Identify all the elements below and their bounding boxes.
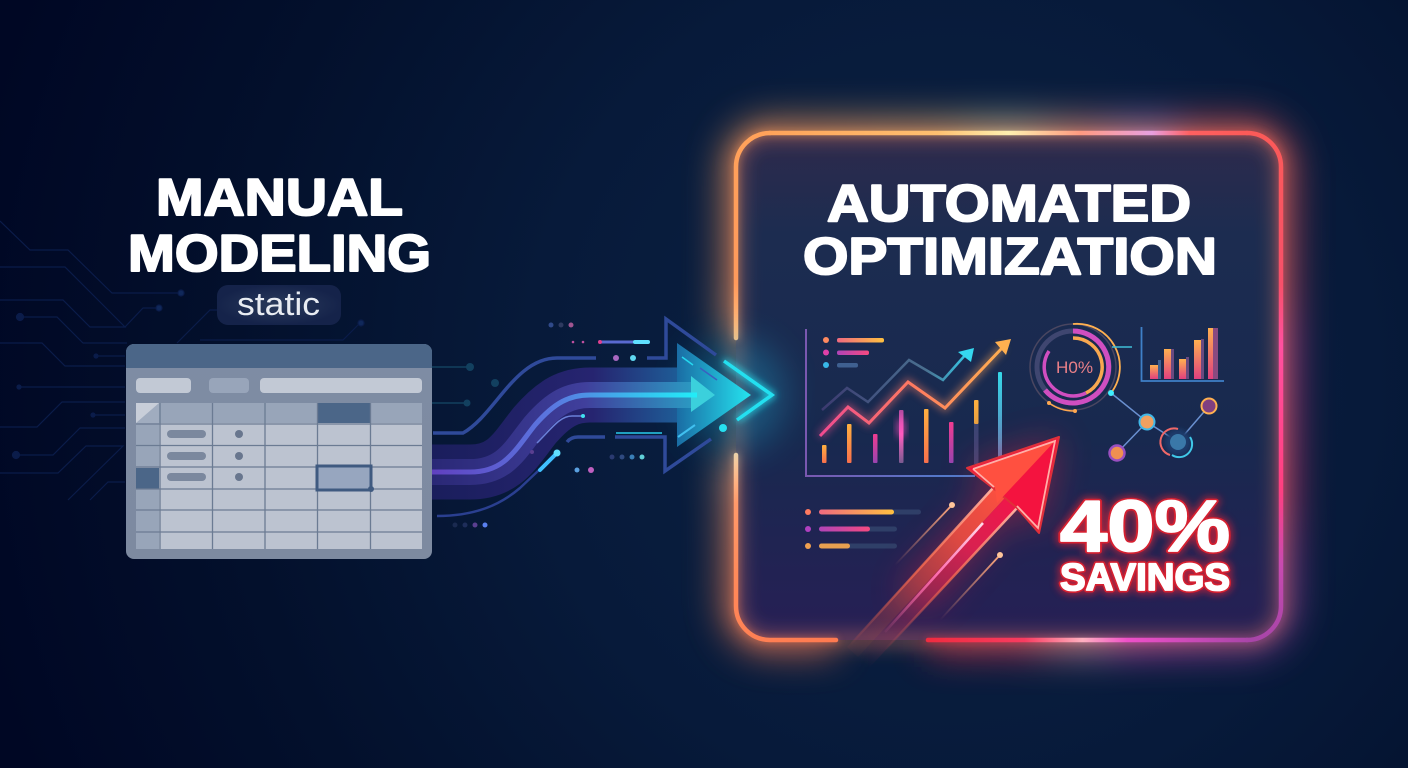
heading: Manual Modeling: MODELING [128, 225, 431, 283]
panel: automated optimization [736, 133, 1281, 640]
red growth arrow [847, 437, 1059, 667]
callout: 40% savings: SAVINGS [1060, 557, 1230, 599]
badge: static: static [237, 286, 320, 322]
callout: 40% savings: SAVINGS [1060, 557, 1230, 599]
transition arrow [432, 319, 785, 528]
donut gauge [1030, 324, 1132, 413]
heading: Manual Modeling: MANUAL [156, 169, 403, 227]
mini bar chart [1142, 327, 1224, 381]
heading: Automated Optimization [803, 175, 1217, 286]
chart legend [823, 337, 884, 368]
progress bars [805, 509, 921, 549]
callout: 40% savings: 40% [1060, 487, 1230, 567]
line chart [806, 329, 1011, 476]
chart bars [822, 372, 1002, 472]
heading: Manual Modeling [128, 169, 431, 283]
heading: Automated Optimization: AUTOMATED [827, 175, 1191, 233]
heading: Automated Optimization: OPTIMIZATION [803, 228, 1217, 286]
network nodes [1108, 390, 1216, 460]
frame glow [736, 133, 1281, 640]
donut gauge: H0% [1056, 358, 1093, 377]
spark streaks [895, 502, 1003, 620]
callout: 40% savings: SAVINGS [1060, 557, 1230, 599]
callout: 40% savings: 40% [1060, 487, 1230, 567]
lower trend line [820, 339, 1011, 436]
spreadsheet [126, 344, 432, 559]
callout: 40% savings: 40% [1060, 487, 1230, 567]
glowing frame [736, 133, 1281, 640]
upper trend line [822, 348, 974, 410]
callout: 40% savings [1060, 487, 1230, 599]
circuit lines background [0, 221, 364, 500]
badge: static [217, 285, 341, 325]
